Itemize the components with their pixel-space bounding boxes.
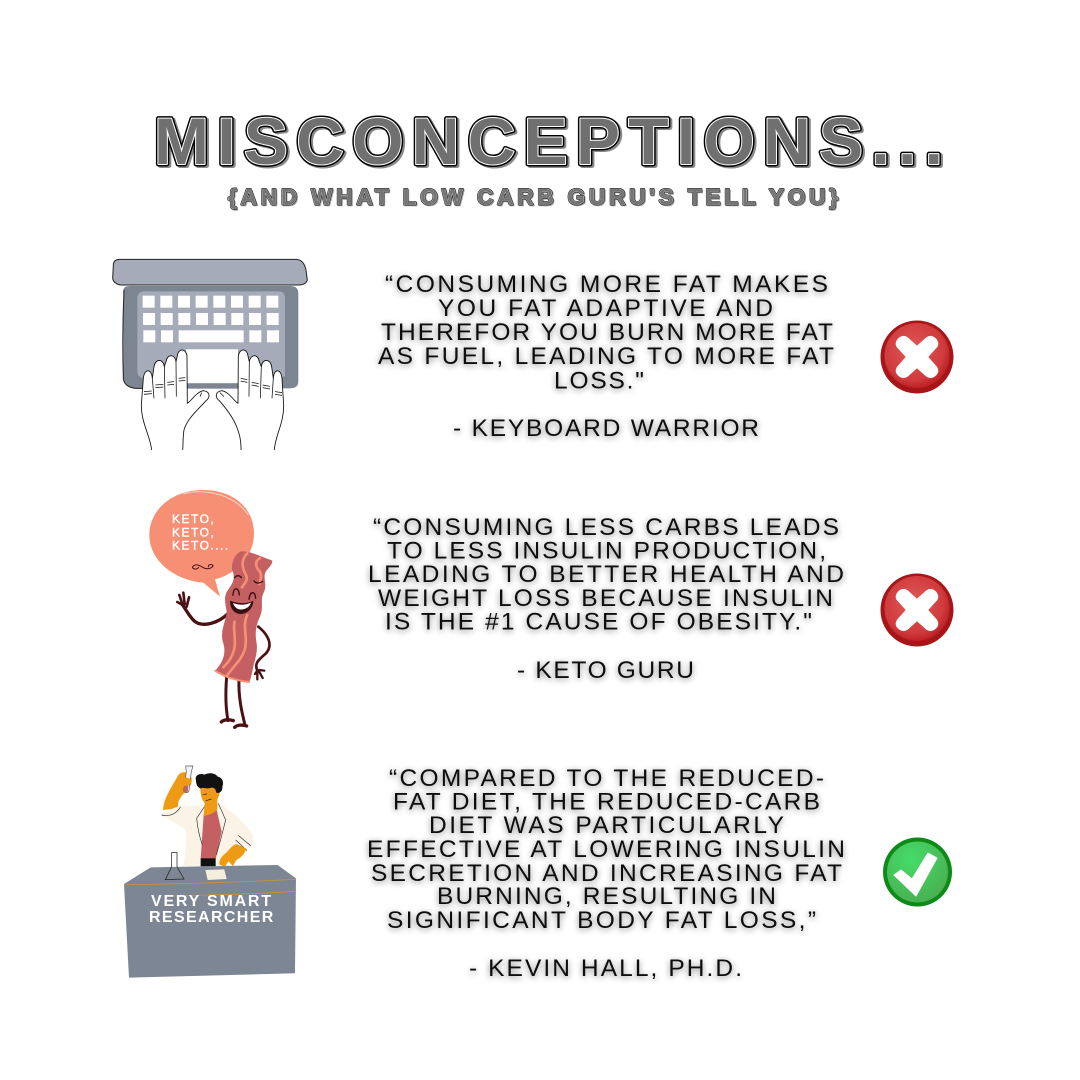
desk label: RESEARCHER [149,909,274,926]
quote: keto guru: - KETO GURU [517,657,694,684]
arms and legs [177,593,269,727]
icon: bacon with speech bubble [149,490,272,727]
glove hand [219,844,246,867]
quote: keyboard warrior [378,271,834,442]
coat lines [162,803,251,855]
neck and face [204,797,217,816]
quote: keyboard warrior: AS FUEL, LEADING TO MORE FAT [378,343,834,370]
test tube [184,766,193,793]
quote: kevin hall: SECRETION AND INCREASING FAT [371,860,842,887]
quote: kevin hall: DIET WAS PARTICULARLY [429,812,784,839]
title: MISCONCEPTIONS... [154,104,943,178]
desk [124,853,296,978]
icon: laptop with typing hands [113,259,307,450]
quote: kevin hall: “COMPARED TO THE REDUCED- [389,765,824,792]
icon: researcher at desk [124,766,296,978]
forearm and hand [163,772,192,810]
quote: keto guru: TO LESS INSULIN PRODUCTION, [387,538,826,564]
quote: kevin hall: EFFECTIVE AT LOWERING INSULIN [367,836,845,863]
lab coat [161,803,253,866]
quote: keto guru: “CONSUMING LESS CARBS LEADS [373,514,839,541]
icon: red cross [880,320,954,394]
desk label: VERY SMART [151,893,271,910]
quote: kevin hall: - KEVIN HALL, PH.D. [469,955,742,982]
desk label [149,893,274,926]
quote: kevin hall: BURNING, RESULTING IN [437,883,776,910]
quote: keyboard warrior: - KEYBOARD WARRIOR [453,415,759,442]
title: MISCONCEPTIONS... [154,104,943,178]
quote: keto guru [368,514,844,684]
subtitle: {AND WHAT LOW CARB GURU'S TELL YOU} [228,184,838,210]
hair [196,773,223,793]
quote: kevin hall: FAT DIET, THE REDUCED-CARB [393,788,820,816]
quote: keto guru: WEIGHT LOSS BECAUSE INSULIN [378,585,833,612]
quote: keyboard warrior: “CONSUMING MORE FAT MAKES [385,271,828,298]
quote: keto guru: IS THE #1 CAUSE OF OBESITY." [385,608,812,636]
speech bubble: KETO.... [172,538,230,552]
subtitle: {AND WHAT LOW CARB GURU'S TELL YOU} [228,184,838,210]
quote: keyboard warrior: YOU FAT ADAPTIVE AND [438,295,773,322]
quote: keto guru: LEADING TO BETTER HEALTH AND [368,561,844,588]
bacon body [215,551,272,682]
subtitle: {AND WHAT LOW CARB GURU'S TELL YOU} [229,186,839,210]
subtitle: {AND WHAT LOW CARB GURU'S TELL YOU} [228,184,838,210]
icon: red cross [880,574,954,646]
quote: kevin hall [367,765,845,982]
title: MISCONCEPTIONS... [154,104,943,178]
shirt [201,810,222,859]
speech bubble: KETO, [172,512,215,526]
face [230,576,263,614]
speech bubble [149,490,254,597]
quote: kevin hall: SIGNIFICANT BODY FAT LOSS,” [387,907,816,934]
quote: keyboard warrior: THEREFOR YOU BURN MORE FAT [381,319,833,346]
icon: green check [883,838,952,906]
title: MISCONCEPTIONS... [156,106,945,180]
quote: keyboard warrior: LOSS." [554,368,644,394]
speech bubble: KETO, [172,525,215,539]
researcher [161,766,253,867]
